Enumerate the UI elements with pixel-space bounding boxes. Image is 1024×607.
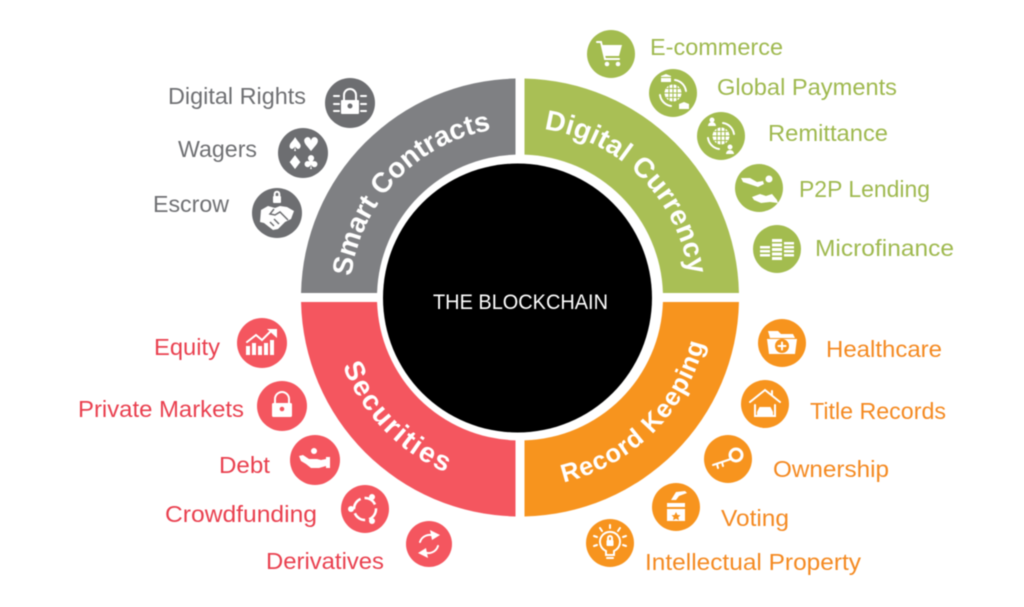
item: global payments: Global Payments	[717, 74, 897, 100]
item: crowdfunding: Crowdfunding	[165, 501, 317, 527]
item: derivatives: Derivatives	[266, 548, 384, 574]
panel: digital currency segment: Digital Currency	[545, 110, 704, 272]
item: global payments	[649, 69, 897, 117]
item: voting: Voting	[721, 505, 789, 531]
item: p2p lending	[735, 164, 930, 212]
panel: record keeping segment	[524, 301, 740, 518]
item: intellectual property: Intellectual Property	[645, 549, 862, 575]
item: debt	[219, 435, 340, 485]
item: equity	[154, 318, 287, 368]
item: e-commerce: E-commerce	[650, 34, 783, 60]
panel: record keeping segment: Record Keeping	[560, 340, 709, 483]
item: microfinance: Microfinance	[815, 235, 954, 261]
item: title records	[741, 380, 946, 428]
panel: smart contracts segment	[300, 78, 516, 294]
item: ownership: Ownership	[773, 456, 889, 482]
item: escrow	[153, 188, 302, 238]
item: digital rights: Digital Rights	[168, 83, 306, 109]
panel: securities segment	[300, 301, 516, 518]
item: healthcare	[758, 319, 942, 367]
panel: digital currency segment	[524, 78, 740, 294]
panel: smart contracts segment: Smart Contracts	[332, 116, 490, 276]
item: private markets: Private Markets	[78, 396, 244, 422]
center circle: the blockchain: THE BLOCKCHAIN	[433, 291, 608, 314]
item: escrow: Escrow	[153, 191, 229, 217]
item: e-commerce	[587, 30, 783, 78]
item: crowdfunding	[165, 485, 389, 533]
item: private markets	[78, 381, 307, 431]
item: voting	[652, 483, 789, 531]
item: wagers: ♠	[286, 134, 304, 156]
item: remittance: Remittance	[768, 120, 888, 146]
item: p2p lending: P2P Lending	[799, 176, 930, 202]
center circle: the blockchain	[383, 164, 652, 432]
item: debt: Debt	[219, 452, 271, 478]
item: healthcare: Healthcare	[826, 336, 942, 362]
item: wagers: Wagers	[178, 136, 257, 162]
item: equity: Equity	[154, 334, 221, 360]
panel: securities segment: Securities	[344, 360, 450, 472]
item: intellectual property	[586, 519, 862, 575]
item: ownership	[704, 435, 889, 483]
item: digital rights	[168, 78, 375, 128]
item: microfinance	[753, 225, 954, 273]
item: derivatives	[266, 521, 452, 574]
item: wagers	[178, 128, 328, 178]
item: title records: Title Records	[810, 398, 946, 424]
item: remittance	[697, 112, 888, 160]
item: wagers: ♣	[302, 152, 320, 174]
item: wagers: ♦	[286, 152, 304, 174]
item: wagers: ♥	[302, 134, 320, 156]
